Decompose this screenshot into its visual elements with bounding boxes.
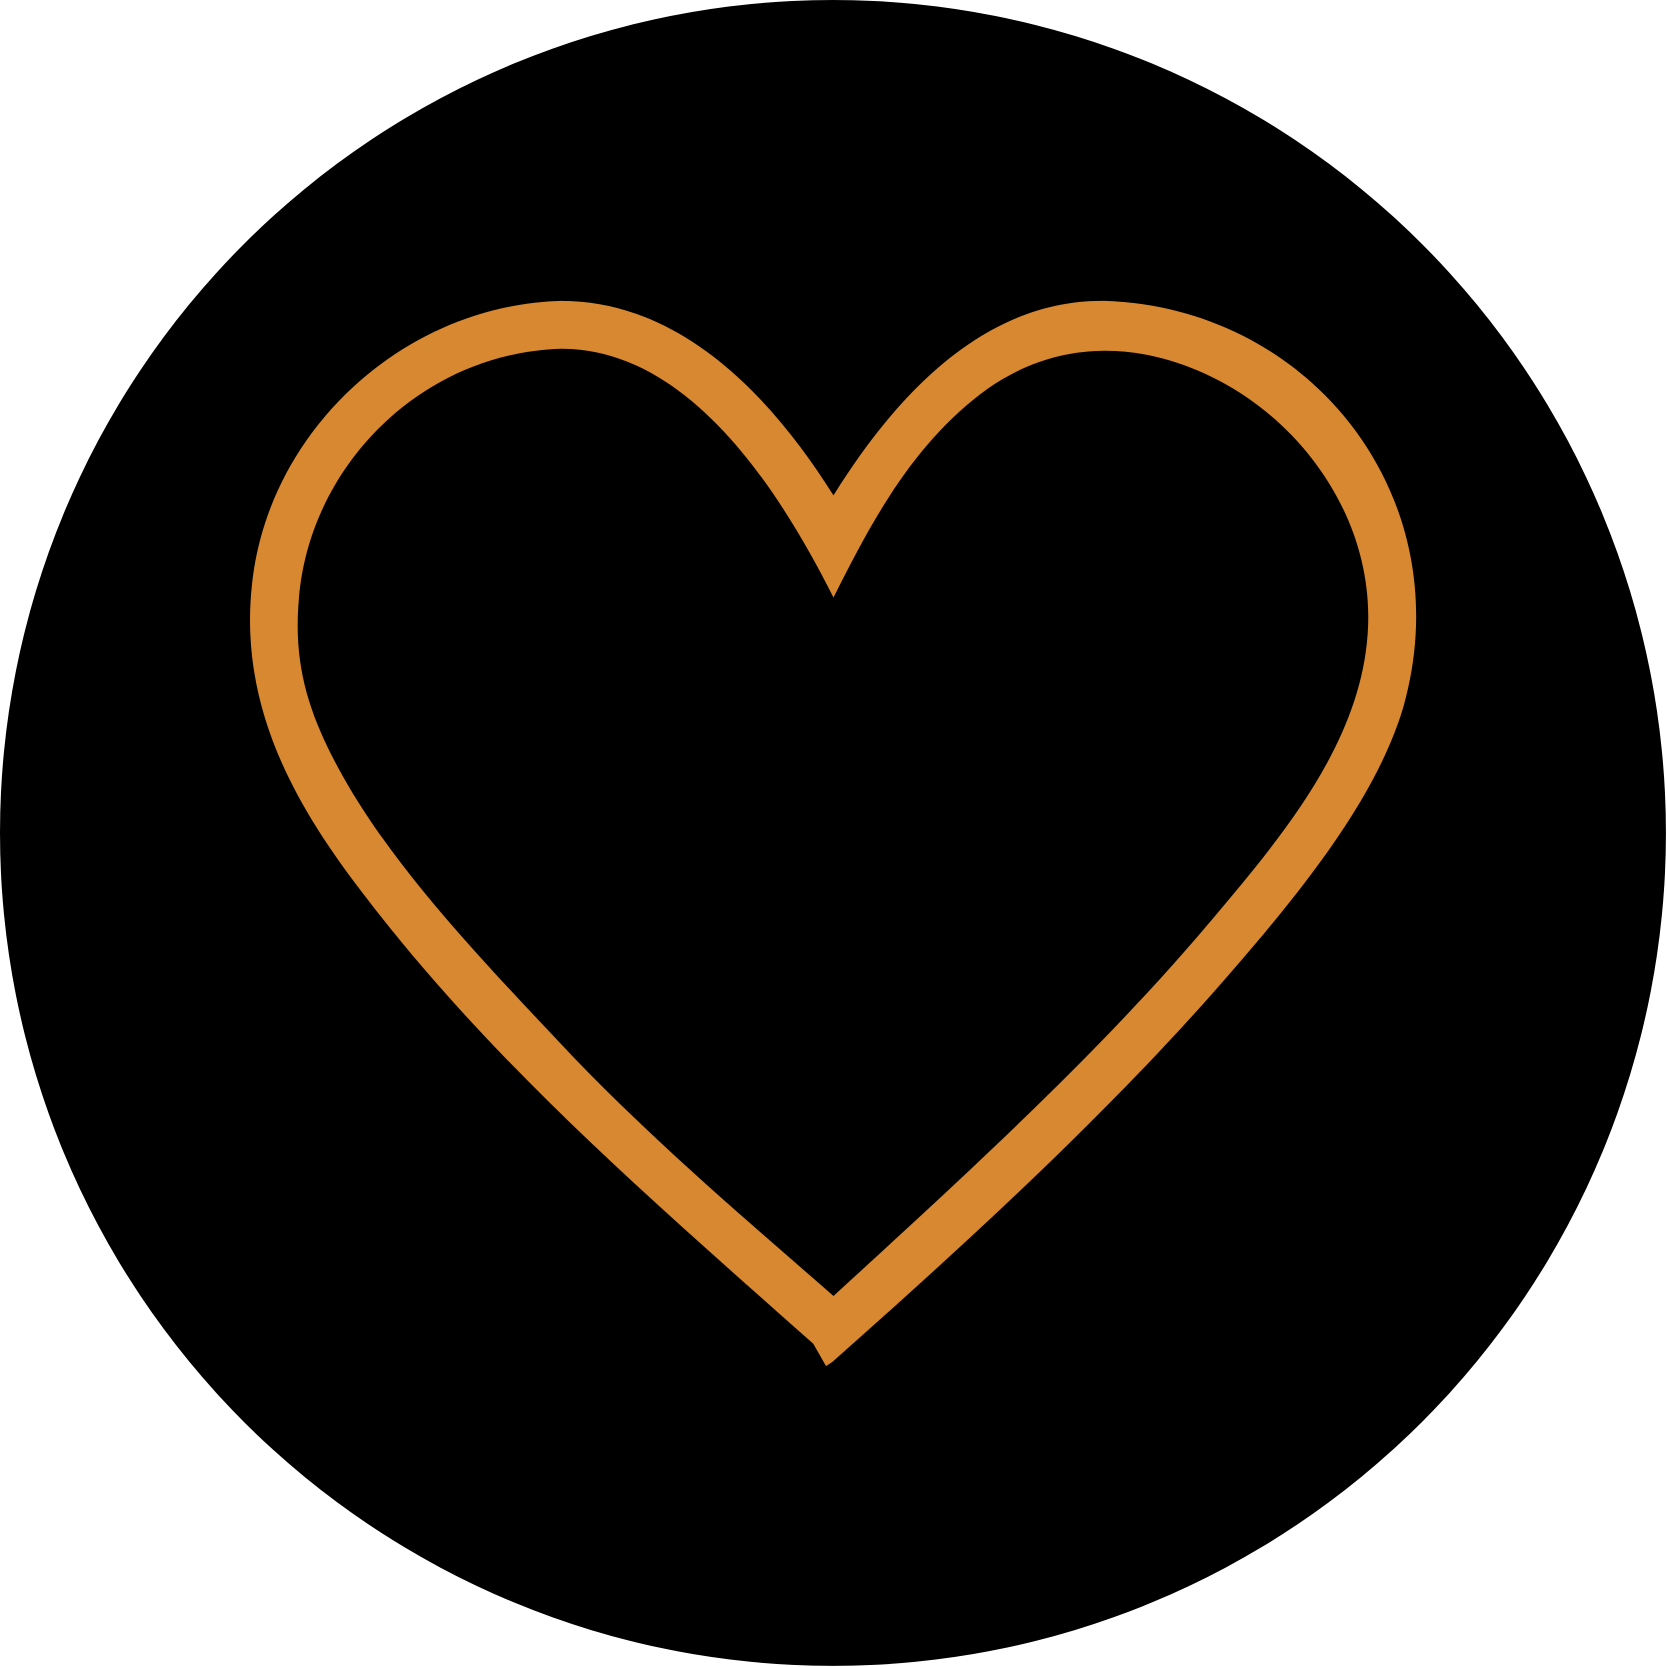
orange heart outline <box>250 301 1416 1366</box>
